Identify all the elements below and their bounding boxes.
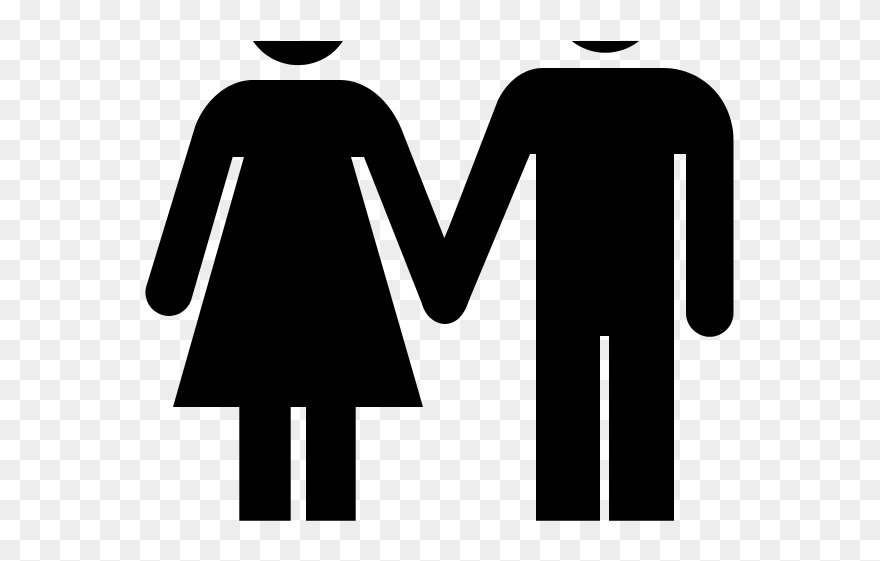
icon: woman legs [239, 406, 356, 521]
icon: joined bodies with linked arms [145, 68, 733, 521]
icon: couple holding hands [145, 41, 733, 521]
icon: woman head [253, 41, 343, 65]
icon: man head [572, 41, 639, 53]
